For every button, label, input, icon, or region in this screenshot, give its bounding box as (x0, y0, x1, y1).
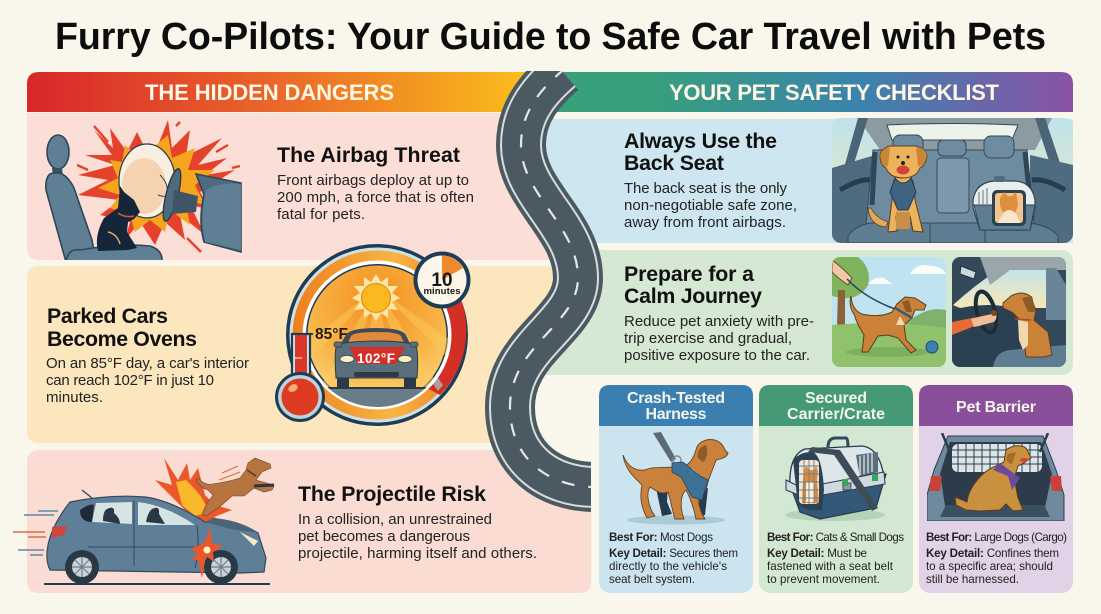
car front (334, 328, 418, 388)
driver seat (993, 345, 1066, 367)
panel: always use the back seat (500, 119, 1073, 243)
panel: crash-tested harness: Harness (646, 406, 707, 423)
icon: barrier car (927, 433, 1064, 521)
car body (47, 496, 266, 573)
panel: crash-tested harness (599, 385, 753, 593)
panel: pet barrier (919, 385, 1073, 593)
steering wheel (972, 289, 1000, 335)
heading: parked cars become ovens: Parked Cars (47, 304, 168, 328)
gauge outer ring (286, 244, 468, 426)
gauge inner disc (303, 261, 451, 409)
85F label: 85°F (315, 326, 348, 343)
text block: airbag threat (277, 172, 474, 223)
icon: car treat illustration (952, 257, 1066, 367)
best for: Best For: Cats & Small Dogs (767, 531, 904, 544)
text block: airbag threat: Front airbags deploy at up to (277, 172, 469, 189)
heading: the hidden dangers: THE HIDDEN DANGERS (145, 80, 394, 105)
pillar and rear seat (1046, 268, 1066, 320)
front wheel (204, 550, 238, 584)
heading: prepare for a calm journey (624, 262, 762, 308)
dashboard (196, 174, 241, 252)
steering wheel (162, 168, 182, 222)
mirror (960, 266, 976, 279)
key detail: Key Detail: Secures them (609, 547, 738, 560)
ground line (44, 583, 270, 585)
key detail: fastened with a seat belt (767, 560, 894, 573)
text block: back seat: away from front airbags. (624, 214, 786, 231)
panel: header checklist (500, 72, 1073, 112)
front side window (138, 502, 195, 525)
card body (599, 385, 753, 593)
key detail: to prevent movement. (767, 573, 880, 586)
car roof and pillars (858, 118, 1052, 150)
text block: back seat: The back seat is the only (624, 180, 788, 197)
icon: airbag illustration (46, 120, 241, 262)
golden dog sitting (955, 446, 1031, 511)
explosion (155, 458, 232, 525)
sun (352, 274, 400, 321)
heading: always use the back seat (624, 129, 777, 175)
human arm (952, 314, 996, 335)
panel: prepare for a calm journey (500, 250, 1073, 375)
hills (906, 309, 946, 328)
dash (952, 305, 1020, 367)
key detail (767, 547, 894, 586)
explosion burst (78, 120, 235, 245)
icon: carrier (785, 438, 886, 521)
text block: projectile risk: In a collision, an unrestrained (298, 511, 492, 528)
panel: the hidden dangers backgrounds (27, 72, 600, 593)
leash (847, 279, 895, 309)
text block: calm journey: positive exposure to the car. (624, 347, 810, 364)
10 minutes timer (414, 252, 470, 308)
rear side window (92, 502, 132, 524)
gauge red sector (427, 266, 466, 395)
passengers (103, 508, 165, 524)
heading: prepare for a calm journey: Prepare for a (624, 262, 754, 286)
panel: secured carrier: Carrier/Crate (787, 406, 885, 423)
icon: projectile crash illustration (13, 458, 274, 585)
cat carrier (973, 176, 1035, 230)
text block: parked cars (46, 355, 249, 406)
card body (759, 385, 913, 593)
key detail: Key Detail: Must be (767, 547, 867, 560)
window view (953, 270, 1046, 308)
text block: back seat: non-negotiable safe zone, (624, 197, 797, 214)
heading: prepare for a calm journey: Calm Journey (624, 284, 762, 308)
10 minutes timer: 10 (431, 270, 453, 291)
sun rays (311, 300, 449, 388)
rear wheel (65, 550, 99, 584)
golden dog (868, 146, 927, 232)
card body (919, 385, 1073, 593)
icon: back seat illustration (832, 118, 1073, 243)
back seats (866, 150, 1034, 224)
text block: back seat (624, 180, 797, 231)
card header (919, 385, 1073, 426)
text block: calm journey: Reduce pet anxiety with pre- (624, 313, 814, 330)
panel: airbag threat (27, 113, 600, 260)
seat cushion (848, 223, 1058, 243)
doors (832, 155, 875, 243)
tree trunk (837, 290, 845, 327)
best for: Best For: Large Dogs (Cargo) (926, 531, 1067, 544)
panel: header hidden dangers (27, 72, 526, 112)
best for: Best For: Most Dogs (609, 531, 713, 544)
flying dog (196, 458, 274, 516)
text block: airbag threat: fatal for pets. (277, 206, 365, 223)
foliage (832, 257, 869, 298)
icon: harnessed dog (623, 432, 728, 524)
key detail: to a specific area; should (926, 560, 1053, 573)
airbag (119, 144, 175, 218)
heading: always use the back seat: Always Use the (624, 129, 777, 153)
panel: pet safety checklist backgrounds (500, 72, 1073, 375)
heading: the airbag threat: The Airbag Threat (277, 143, 460, 167)
text block: calm journey (624, 313, 814, 364)
heading: your pet safety checklist: YOUR PET SAFETY CHECKLIST (669, 80, 1000, 105)
title: Furry Co-Pilots: Your Guide to Safe Car Travel with Pets (55, 15, 1046, 57)
ball (926, 341, 938, 353)
dog walking (850, 296, 926, 353)
card header (759, 385, 913, 426)
panel: crash-tested harness: Crash-Tested (627, 390, 725, 407)
key detail: still be harnessed. (926, 573, 1019, 586)
car seat (47, 135, 69, 169)
clouds (868, 265, 946, 284)
text block: parked cars: minutes. (46, 389, 103, 406)
impact spark (191, 528, 223, 578)
grass (832, 323, 946, 367)
road ground (328, 388, 426, 407)
quarter window (80, 505, 94, 522)
panel: parked cars (27, 266, 600, 443)
thermometer (275, 334, 325, 422)
cat silhouette (97, 186, 140, 251)
10 minutes timer: minutes (424, 286, 460, 297)
car front: 102°F (357, 351, 395, 366)
panel: secured carrier: Secured (805, 390, 867, 407)
text block: parked cars: can reach 102°F in just 10 (46, 372, 214, 389)
key detail: directly to the vehicle's (609, 560, 727, 573)
panel: secured carrier (759, 385, 913, 593)
text block: projectile risk (298, 511, 537, 562)
heading: parked cars become ovens (47, 304, 197, 351)
text block: projectile risk: pet becomes a dangerous (298, 528, 470, 545)
icon: park walk illustration (832, 257, 946, 367)
icon: heat gauge (275, 244, 470, 426)
handler arm (832, 260, 852, 285)
panel: pet barrier: Pet Barrier (956, 399, 1036, 416)
speed lines (18, 511, 58, 555)
heading: the projectile risk: The Projectile Risk (298, 482, 486, 506)
dog sitting (1003, 293, 1052, 357)
key detail: seat belt system. (609, 573, 695, 586)
text block: calm journey: trip exercise and gradual, (624, 330, 792, 347)
card header (599, 385, 753, 426)
road divider (510, 71, 595, 487)
text block: projectile risk: projectile, harming itself and others. (298, 545, 537, 562)
door seams and tail light (88, 500, 198, 568)
panel: projectile risk (27, 450, 591, 593)
key detail: Key Detail: Confines them (926, 547, 1059, 560)
heading: always use the back seat: Back Seat (624, 151, 724, 175)
text block: parked cars: On an 85°F day, a car's interior (46, 355, 249, 372)
spark lines (77, 122, 240, 252)
key detail (926, 547, 1059, 586)
heading: parked cars become ovens: Become Ovens (47, 327, 197, 351)
text block: airbag threat: 200 mph, a force that is often (277, 189, 474, 206)
key detail (609, 547, 738, 586)
